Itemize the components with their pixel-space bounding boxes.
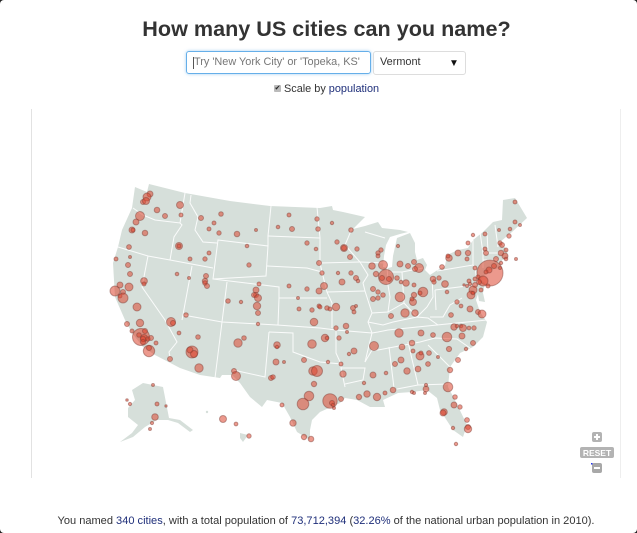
state dropdown: ▼ bbox=[449, 58, 459, 69]
footer summary: You named 340 cities, with a total population of 73,712,394 (32.26% of the national urban population in 2010). bbox=[57, 515, 595, 527]
state dropdown bbox=[373, 51, 466, 75]
scale by population checkbox: ✔ bbox=[275, 85, 280, 92]
city bubbles bbox=[110, 191, 522, 446]
reset button: RESET bbox=[583, 448, 612, 458]
zoom out button bbox=[591, 463, 602, 473]
city search input: Try 'New York City' or 'Topeka, KS' bbox=[194, 56, 360, 68]
city search input bbox=[186, 51, 371, 74]
scale by population checkbox: Scale by population bbox=[284, 83, 379, 95]
title: How many US cities can you name? bbox=[142, 16, 511, 41]
state borders bbox=[118, 193, 500, 389]
zoom in button bbox=[592, 432, 602, 442]
state dropdown: Vermont bbox=[380, 56, 421, 68]
land: contiguous US and Alaska, Hawaii bbox=[113, 184, 527, 442]
